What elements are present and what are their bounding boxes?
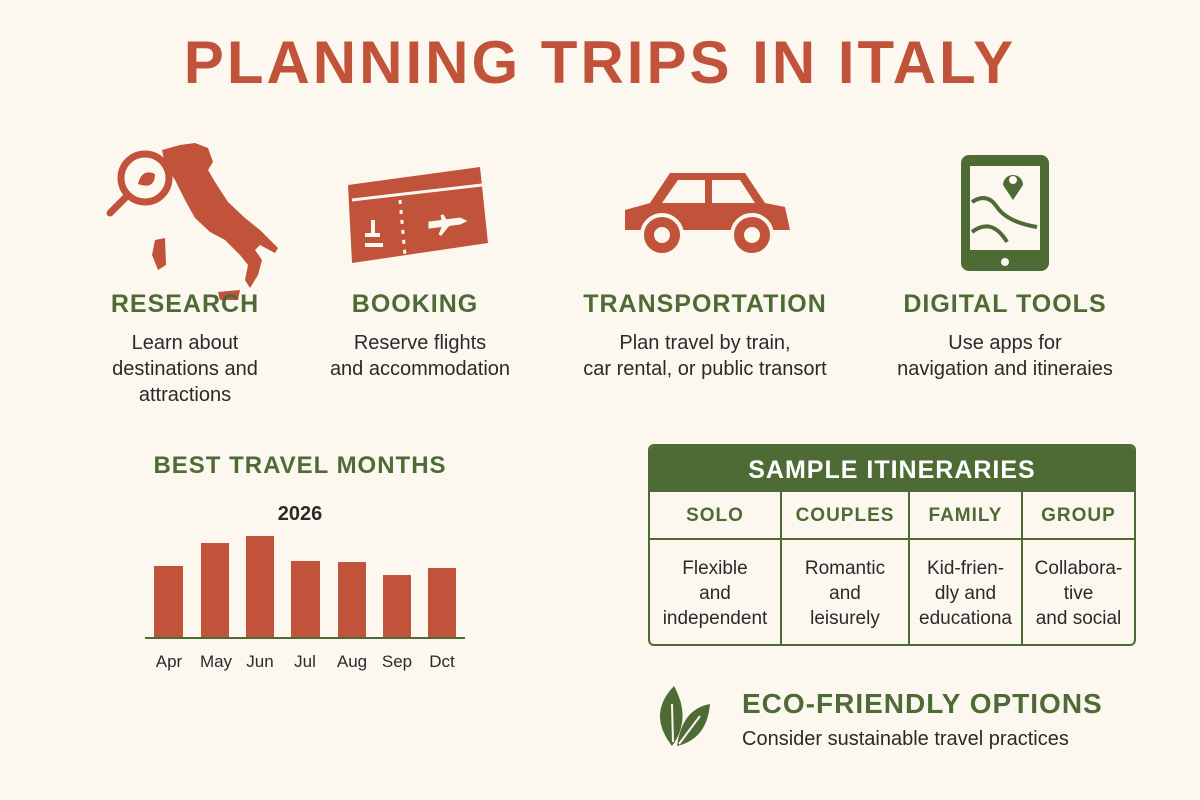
bar chart: Aug bbox=[337, 652, 367, 671]
text: digital tools bbox=[897, 332, 1113, 380]
table: sample itineraries bbox=[648, 444, 1136, 646]
icon: leaves bbox=[660, 686, 710, 746]
table: sample itineraries: educationa bbox=[919, 608, 1012, 629]
text: digital tools: Use apps for bbox=[948, 332, 1062, 354]
table header: SAMPLE ITINERARIES bbox=[748, 456, 1036, 484]
table: sample itineraries: leisurely bbox=[810, 608, 880, 629]
bar chart: Sep bbox=[382, 652, 412, 671]
text: transportation: car rental, or public transort bbox=[583, 358, 827, 380]
table header bbox=[650, 446, 1134, 492]
heading: research: RESEARCH bbox=[111, 290, 259, 318]
bar chart: 2026 bbox=[278, 503, 322, 525]
text: research: Learn about destinations and attractions bbox=[112, 332, 258, 406]
text: digital tools: navigation and itineraies bbox=[897, 358, 1113, 380]
table: sample itineraries: COUPLES bbox=[796, 505, 894, 526]
bar chart: May bbox=[200, 652, 233, 671]
bar chart bbox=[145, 503, 465, 671]
table: sample itineraries: Romantic bbox=[805, 558, 885, 579]
table: sample itineraries: FAMILY bbox=[929, 505, 1002, 526]
table: sample itineraries: SOLO bbox=[686, 505, 744, 526]
text: booking: and accommodation bbox=[330, 358, 510, 380]
bar chart: Jun bbox=[246, 652, 274, 671]
table: sample itineraries: Kid-frien- bbox=[927, 558, 1004, 579]
table: sample itineraries: and social bbox=[1036, 608, 1121, 629]
table: sample itineraries: and bbox=[829, 583, 861, 604]
table: sample itineraries: dly and bbox=[935, 583, 996, 604]
icon: ticket bbox=[348, 167, 488, 263]
text: eco-friendly: Consider sustainable travel practices bbox=[742, 728, 1069, 750]
bar chart: Jul bbox=[294, 652, 316, 671]
title: PLANNING TRIPS IN ITALY bbox=[184, 29, 1016, 96]
table: sample itineraries: tive bbox=[1064, 583, 1093, 604]
heading: digital tools: DIGITAL TOOLS bbox=[903, 290, 1107, 318]
heading: best travel months: BEST TRAVEL MONTHS bbox=[153, 452, 447, 479]
bar chart: Dct bbox=[429, 652, 455, 671]
table: sample itineraries: and bbox=[699, 583, 731, 604]
icon: italy map with magnifier bbox=[106, 143, 278, 300]
heading: transportation: TRANSPORTATION bbox=[583, 290, 827, 318]
icon: phone with map bbox=[961, 155, 1049, 271]
table: sample itineraries: Flexible bbox=[682, 558, 748, 579]
heading: eco-friendly: ECO-FRIENDLY OPTIONS bbox=[742, 688, 1103, 719]
text: transportation: Plan travel by train, bbox=[619, 332, 791, 354]
table: sample itineraries: independent bbox=[663, 608, 767, 629]
icon: car bbox=[625, 173, 790, 253]
text: transportation bbox=[583, 332, 827, 380]
text: booking: Reserve flights bbox=[354, 332, 486, 354]
table: sample itineraries: Collabora- bbox=[1035, 558, 1122, 579]
heading: booking: BOOKING bbox=[352, 290, 478, 318]
table: sample itineraries: GROUP bbox=[1041, 505, 1116, 526]
bar chart: Apr bbox=[156, 652, 183, 671]
text: booking bbox=[330, 332, 510, 380]
